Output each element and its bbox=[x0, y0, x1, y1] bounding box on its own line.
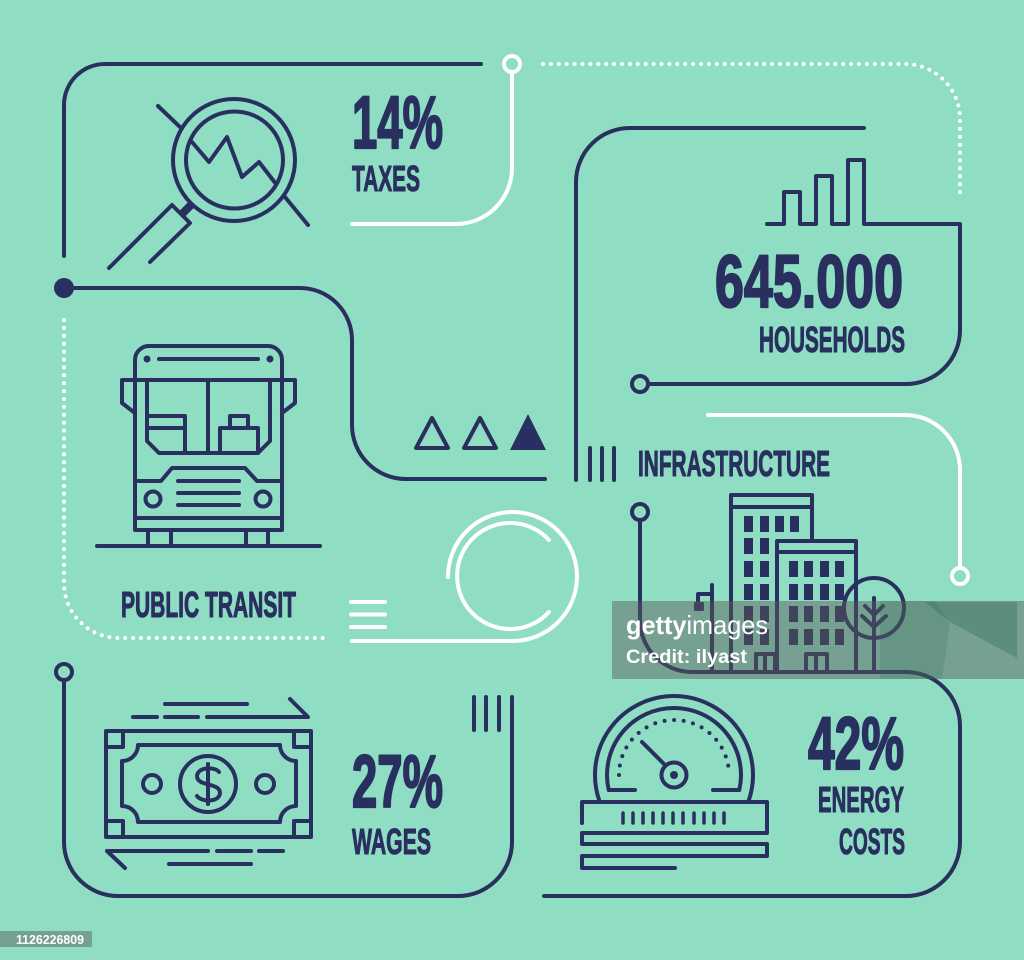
stat: 14% taxes: TAXES bbox=[352, 158, 420, 199]
icon: magnifier with falling chart bbox=[109, 99, 308, 268]
stat: 27% wages: WAGES bbox=[352, 821, 431, 862]
connector: navy node to triangles bbox=[54, 278, 545, 479]
connector: taxes navy outline bbox=[64, 64, 481, 256]
icon: bus bbox=[97, 346, 320, 546]
icon: banknote with arrows bbox=[106, 699, 311, 868]
watermark: gettyimages bbox=[626, 610, 768, 640]
watermark: Credit: ilyast bbox=[626, 647, 748, 668]
stat: 14% taxes bbox=[352, 81, 443, 199]
stat: 27% wages bbox=[352, 740, 443, 862]
stat: 14% taxes: 14% bbox=[352, 81, 443, 164]
bar chart line: households bbox=[632, 160, 960, 392]
triangles bbox=[416, 414, 546, 450]
white spiral circle connector bbox=[351, 512, 577, 641]
icon: buildings, lamp and tree bbox=[694, 495, 904, 672]
label: public transit: PUBLIC TRANSIT bbox=[121, 584, 296, 625]
stat: 645.000 households: 645.000 bbox=[715, 240, 903, 323]
connector: white infrastructure line bbox=[708, 415, 968, 584]
watermark bbox=[612, 601, 1024, 679]
connector: taxes white line with ring bbox=[352, 56, 520, 224]
label: infrastructure: INFRASTRUCTURE bbox=[638, 443, 830, 484]
stat: 27% wages: 27% bbox=[352, 740, 443, 823]
image id tag: 1126226809 bbox=[16, 932, 84, 947]
connector: households frame bbox=[576, 128, 864, 480]
connector: wages frame bbox=[56, 664, 512, 896]
connector: dotted top right bbox=[543, 64, 960, 194]
stat: 42% energy costs: 42% bbox=[808, 702, 904, 785]
stat: 42% energy costs bbox=[808, 702, 905, 862]
stat: 42% energy costs: ENERGY bbox=[818, 779, 904, 820]
stat: 42% energy costs: COSTS bbox=[839, 821, 905, 862]
stat: 645.000 households: HOUSEHOLDS bbox=[759, 319, 905, 360]
connector: dotted left bbox=[64, 320, 323, 638]
connector: energy frame bbox=[544, 504, 960, 896]
icon: gauge meter bbox=[582, 696, 767, 868]
stat: 645.000 households bbox=[715, 240, 905, 360]
